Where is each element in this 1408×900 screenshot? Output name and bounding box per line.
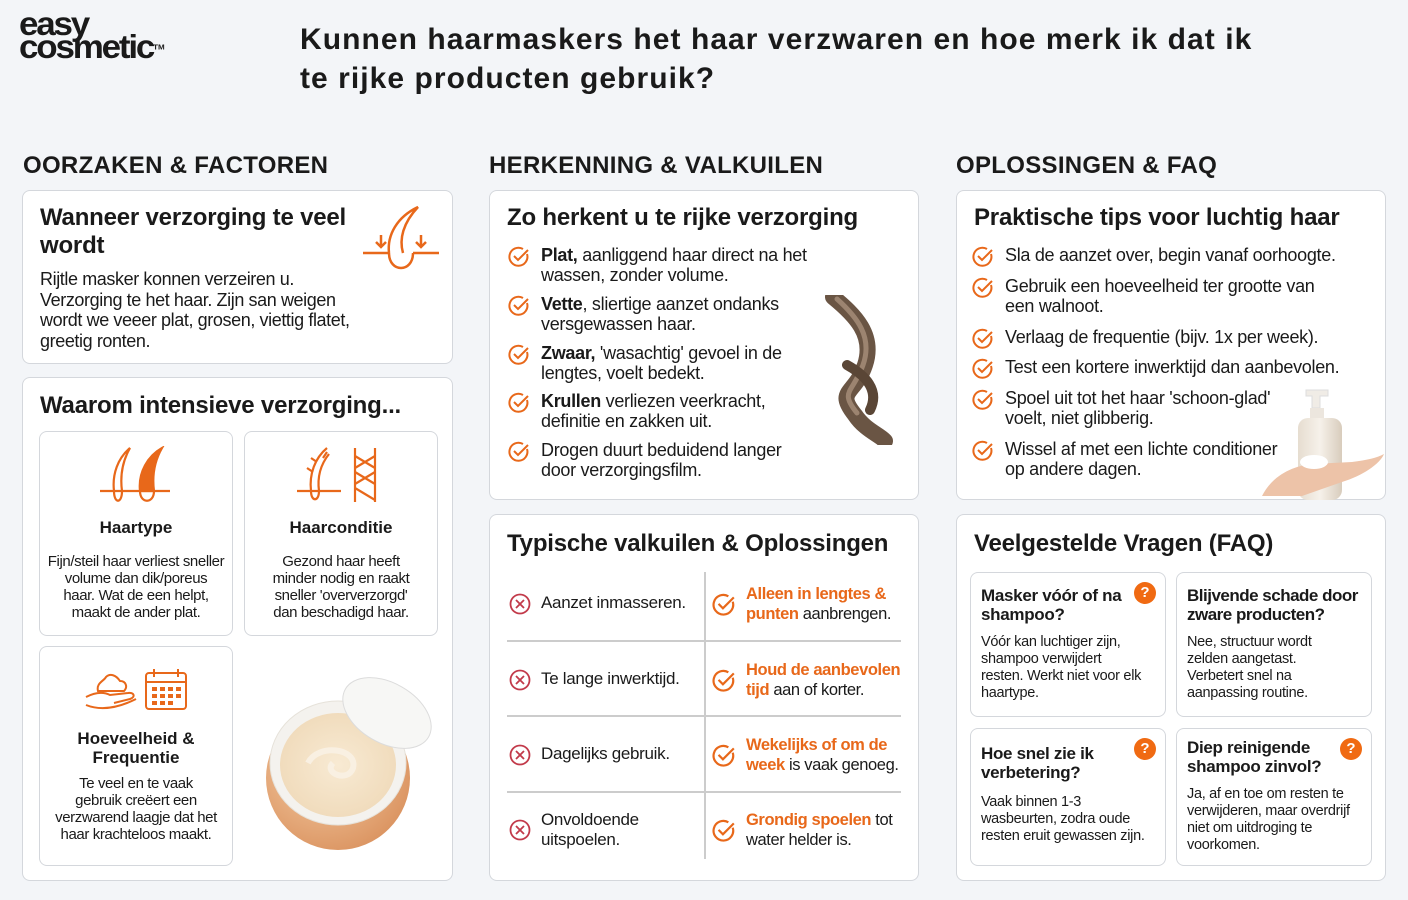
list item 4: Krullen verliezen veerkracht, bbox=[541, 391, 765, 411]
icon: hair follicle bbox=[363, 206, 439, 270]
card: haarconditie: dan beschadigd haar. bbox=[273, 604, 409, 621]
tip 6: op andere dagen. bbox=[1005, 459, 1141, 479]
row 3: week is vaak genoeg. bbox=[746, 756, 899, 774]
image: pump bottle and hand bbox=[1262, 390, 1384, 500]
faq card 4: voorkomen. bbox=[1187, 837, 1260, 853]
faq card 1: ? bbox=[1140, 584, 1150, 601]
row 2: Te lange inwerktijd. bbox=[541, 669, 680, 688]
list item 1: Plat, aanliggend haar direct na het bbox=[541, 245, 807, 265]
list item 1: wassen, zonder volume. bbox=[541, 265, 728, 285]
tip 6 bbox=[972, 439, 1278, 479]
icon: damaged hair bbox=[297, 447, 376, 502]
column header: herkenning: HERKENNING & VALKUILEN bbox=[489, 152, 823, 179]
text: wordt we veeer plat, grosen, viettig flatet, bbox=[40, 310, 350, 330]
panel: zo herkent u te rijke verzorging bbox=[489, 190, 919, 500]
list item 5: Drogen duurt beduidend langer bbox=[541, 440, 782, 460]
card: haarconditie: minder nodig en raakt bbox=[273, 570, 409, 587]
faq card 1: haartype. bbox=[981, 685, 1039, 701]
faq card 2: Blijvende schade door bbox=[1187, 586, 1358, 605]
faq card 4: shampoo zinvol? bbox=[1187, 757, 1321, 776]
text bbox=[40, 269, 350, 351]
faq card 2: zelden aangetast. bbox=[1187, 651, 1296, 667]
text: Verzorging te het haar. Zijn san weigen bbox=[40, 290, 336, 310]
tip 1: Sla de aanzet over, begin vanaf oorhoogte. bbox=[1005, 245, 1336, 265]
heading: Zo herkent u te rijke verzorging bbox=[507, 204, 858, 231]
tip 5 bbox=[972, 388, 1270, 428]
row 4: uitspoelen. bbox=[541, 830, 620, 849]
card: hoeveelheid & frequentie: Hoeveelheid & bbox=[77, 729, 195, 748]
faq card 4: Diep reinigende bbox=[1187, 738, 1310, 757]
row 1: Aanzet inmasseren. bbox=[541, 593, 686, 612]
tip 6: Wissel af met een lichte conditioner bbox=[1005, 439, 1277, 459]
card: haartype: volume dan dik/poreus bbox=[65, 570, 207, 587]
faq card 4: ? bbox=[1346, 740, 1356, 757]
tip 2 bbox=[972, 276, 1315, 316]
panel: praktische tips bbox=[956, 190, 1386, 500]
card: haarconditie: sneller 'oververzorgd' bbox=[275, 587, 407, 604]
card: haartype: Fijn/steil haar verliest sneller bbox=[48, 553, 224, 570]
heading: Praktische tips voor luchtig haar bbox=[974, 204, 1340, 231]
row 2 bbox=[510, 661, 900, 699]
row 4: water helder is. bbox=[746, 831, 851, 849]
heading: wordt bbox=[40, 232, 104, 259]
column header: oplossingen: OPLOSSINGEN & FAQ bbox=[956, 152, 1217, 179]
faq card 3: wasbeurten, zodra oude bbox=[981, 811, 1130, 827]
tip 2: een walnoot. bbox=[1005, 296, 1103, 316]
tip 5: voelt, niet glibberig. bbox=[1005, 408, 1154, 428]
card: hoeveelheid & frequentie: Frequentie bbox=[93, 748, 179, 767]
row 1: punten aanbrengen. bbox=[746, 605, 891, 623]
row 2: tijd aan of korter. bbox=[746, 681, 864, 699]
heading: Veelgestelde Vragen (FAQ) bbox=[974, 530, 1273, 557]
faq card 3: Hoe snel zie ik bbox=[981, 744, 1094, 763]
faq card 2: zware producten? bbox=[1187, 605, 1324, 624]
list item 4: definitie en zakken uit. bbox=[541, 411, 712, 431]
tip 5: Spoel uit tot het haar 'schoon-glad' bbox=[1005, 388, 1270, 408]
text: greetig ronten. bbox=[40, 330, 150, 350]
list item 5: door verzorgingsfilm. bbox=[541, 460, 702, 480]
card: hoeveelheid & frequentie: Te veel en te vaak bbox=[79, 775, 193, 792]
list item 2: versgewassen haar. bbox=[541, 314, 696, 334]
list item 3: Zwaar, 'wasachtig' gevoel in de bbox=[541, 343, 782, 363]
title: te rijke producten gebruik? bbox=[300, 62, 715, 95]
list item 3: lengtes, voelt bedekt. bbox=[541, 363, 705, 383]
text: Rijtle masker konnen verzeiren u. bbox=[40, 269, 294, 289]
card: haartype: maakt de ander plat. bbox=[72, 604, 200, 621]
heading: Waarom intensieve verzorging... bbox=[40, 392, 401, 419]
faq card 4: verwijderen, maar overdrijf bbox=[1187, 803, 1350, 819]
card: haartype bbox=[39, 431, 233, 636]
logo: easy bbox=[19, 6, 88, 43]
faq card 4: Ja, af en toe om resten te bbox=[1187, 786, 1344, 802]
faq card 2: Verbetert snel na bbox=[1187, 668, 1292, 684]
table dividers bbox=[507, 640, 901, 642]
image: cream jar bbox=[266, 677, 432, 850]
list item 4 bbox=[508, 391, 765, 431]
list item 5 bbox=[508, 440, 782, 480]
row 3: Wekelijks of om de bbox=[746, 736, 887, 754]
faq card 1: shampoo? bbox=[981, 605, 1065, 624]
card: hoeveelheid & frequentie: gebruik creëert een bbox=[75, 792, 197, 809]
logo bbox=[19, 6, 165, 65]
row 1 bbox=[510, 585, 891, 623]
row 1: Alleen in lengtes & bbox=[746, 585, 886, 603]
card: haarconditie: Haarconditie bbox=[290, 518, 392, 537]
faq card 4 bbox=[1176, 728, 1372, 866]
list item 2 bbox=[508, 294, 779, 334]
faq card 1: Vóór kan luchtiger zijn, bbox=[981, 634, 1120, 650]
heading bbox=[40, 204, 346, 259]
logo: cosmeticTM bbox=[19, 28, 165, 65]
faq card 2 bbox=[1176, 572, 1372, 717]
faq card 3: ? bbox=[1140, 740, 1150, 757]
faq card 1 bbox=[970, 572, 1166, 717]
card: haarconditie: Gezond haar heeft bbox=[282, 553, 400, 570]
row 2: Houd de aanbevolen bbox=[746, 661, 900, 679]
faq card 1: Masker vóór of na bbox=[981, 586, 1121, 605]
list item 2: Vette, sliertige aanzet ondanks bbox=[541, 294, 779, 314]
image: hair curl bbox=[825, 295, 893, 445]
card: haartype: haar. Wat de een helpt, bbox=[63, 587, 209, 604]
panel: waarom intensieve verzorging bbox=[22, 377, 453, 881]
tip 3: Verlaag de frequentie (bijv. 1x per week). bbox=[1005, 327, 1318, 347]
heading: Typische valkuilen & Oplossingen bbox=[507, 530, 888, 557]
tip 4: Test een kortere inwerktijd dan aanbevolen. bbox=[1005, 357, 1339, 377]
title bbox=[300, 23, 1252, 95]
panel: wanneer verzorging te veel wordt bbox=[22, 190, 453, 364]
row 4: Onvoldoende bbox=[541, 810, 639, 829]
icon: two hairs bbox=[100, 446, 170, 502]
card: hoeveelheid & frequentie: verzwarend laagje dat het bbox=[55, 809, 217, 826]
faq card 1: resten. Werkt niet voor elk bbox=[981, 668, 1141, 684]
row 3 bbox=[510, 736, 899, 774]
faq card 3 bbox=[970, 728, 1166, 866]
faq card 1: shampoo verwijdert bbox=[981, 651, 1101, 667]
row 3: Dagelijks gebruik. bbox=[541, 744, 670, 763]
list item 1 bbox=[508, 245, 807, 285]
panel: FAQ bbox=[956, 514, 1386, 881]
list item 3 bbox=[508, 343, 782, 383]
faq card 3: Vaak binnen 1-3 bbox=[981, 794, 1081, 810]
card: haartype: Haartype bbox=[100, 518, 172, 537]
faq card 4: niet om uitdroging te bbox=[1187, 820, 1312, 836]
panel: typische valkuilen & oplossingen bbox=[489, 514, 919, 881]
faq card 2: Nee, structuur wordt bbox=[1187, 634, 1312, 650]
faq card 3: verbetering? bbox=[981, 763, 1080, 782]
column header: oorzaken: OORZAKEN & FACTOREN bbox=[23, 152, 328, 179]
row 4: Grondig spoelen tot bbox=[746, 811, 892, 829]
faq card 2: aanpassing routine. bbox=[1187, 685, 1308, 701]
faq card 3: resten eruit gewassen zijn. bbox=[981, 828, 1145, 844]
card: hoeveelheid & frequentie bbox=[39, 646, 233, 866]
icon: hand and calendar bbox=[86, 669, 187, 710]
card: hoeveelheid & frequentie: haar krachteloos maakt. bbox=[61, 826, 211, 843]
heading: Wanneer verzorging te veel bbox=[40, 204, 346, 231]
tip 2: Gebruik een hoeveelheid ter grootte van bbox=[1005, 276, 1315, 296]
row 4 bbox=[510, 810, 893, 849]
title: Kunnen haarmaskers het haar verzwaren en hoe merk ik dat ik bbox=[300, 23, 1252, 56]
card: haarconditie bbox=[244, 431, 438, 636]
